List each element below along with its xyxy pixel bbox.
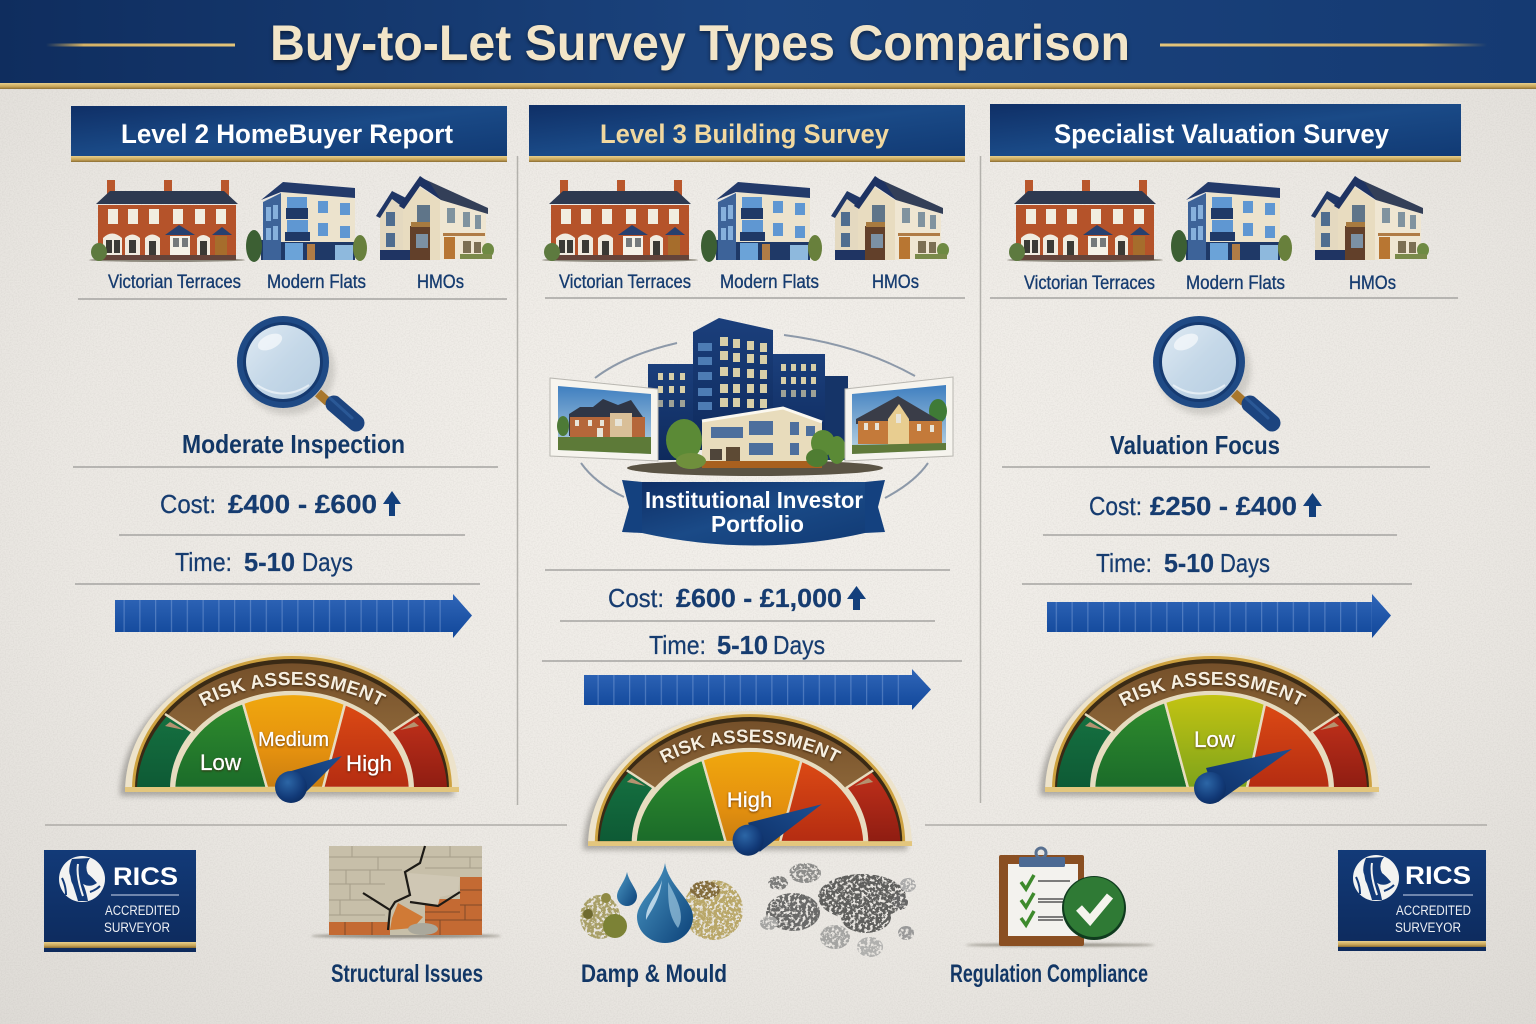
time row: Days bbox=[773, 630, 825, 660]
column dividers bbox=[518, 156, 980, 805]
low label: Low bbox=[1194, 727, 1235, 752]
icon: magnifying glass bbox=[1153, 316, 1272, 423]
needle bbox=[733, 804, 822, 856]
gauge title: RISK ASSESSMENT bbox=[1118, 672, 1307, 708]
time row: 5-10 bbox=[244, 547, 295, 577]
time row: Days bbox=[1220, 548, 1270, 578]
gauge title: RISK ASSESSMENT bbox=[658, 729, 842, 765]
RICS badge right: SURVEYOR bbox=[1395, 920, 1461, 935]
RICS badge left: SURVEYOR bbox=[104, 920, 170, 935]
portfolio banner: Institutional Investor bbox=[645, 487, 863, 513]
property types: HMOs bbox=[872, 272, 919, 293]
cost row: Cost: bbox=[608, 583, 664, 613]
panel heading: Level 3 Building Survey bbox=[600, 119, 889, 149]
RICS badge left: RICS bbox=[113, 863, 178, 891]
needle bbox=[275, 756, 342, 803]
property types: HMOs bbox=[417, 272, 464, 293]
property types bbox=[78, 176, 507, 299]
portfolio banner bbox=[622, 480, 885, 546]
label: damp and mould: Damp & Mould bbox=[581, 960, 727, 988]
gauge segments bbox=[636, 751, 864, 842]
institutional portfolio illustration bbox=[550, 318, 953, 546]
time row: 5-10 bbox=[717, 630, 768, 660]
time row: Time: bbox=[175, 547, 232, 577]
medium label: Medium bbox=[258, 729, 329, 751]
panel heading: Specialist Valuation Survey bbox=[1054, 119, 1389, 149]
mould speckle bbox=[580, 863, 916, 957]
property types: Victorian Terraces bbox=[108, 272, 241, 293]
gauge segments bbox=[1094, 694, 1330, 788]
cost row: £400 - £600 bbox=[228, 489, 377, 519]
panel heading bbox=[529, 105, 965, 162]
ground bbox=[627, 460, 883, 476]
high label: High bbox=[346, 751, 392, 776]
risk gauge: medium-high bbox=[117, 653, 459, 803]
needle bbox=[1194, 749, 1292, 804]
footer divider lines bbox=[45, 824, 1487, 826]
icon: magnifying glass bbox=[237, 316, 356, 423]
icon: structural crack in wall bbox=[311, 846, 501, 938]
cost row bbox=[1089, 491, 1322, 521]
property types: Victorian Terraces bbox=[1024, 273, 1155, 294]
portfolio banner: Portfolio bbox=[711, 511, 804, 537]
bushes bbox=[666, 419, 846, 469]
property types: Modern Flats bbox=[1186, 273, 1285, 294]
time row bbox=[1096, 548, 1270, 578]
icon: clipboard with check bbox=[965, 848, 1155, 946]
timeline arrow bbox=[1047, 594, 1391, 638]
label: regulation compliance: Regulation Compliance bbox=[950, 960, 1148, 988]
time row bbox=[649, 630, 825, 660]
gauge segments bbox=[174, 694, 410, 788]
gauge title: RISK ASSESSMENT bbox=[198, 672, 387, 708]
time row: Time: bbox=[1096, 548, 1152, 578]
icon: lion emblem bbox=[1353, 855, 1399, 901]
property types: Modern Flats bbox=[267, 272, 366, 293]
timeline arrow bbox=[584, 669, 931, 710]
time row bbox=[175, 547, 353, 577]
panel heading bbox=[990, 104, 1461, 162]
time row: Days bbox=[302, 547, 353, 577]
icon: damp and mould bbox=[580, 863, 916, 957]
RICS badge left bbox=[44, 850, 196, 952]
RICS badge right bbox=[1338, 850, 1486, 951]
cost row: Cost: bbox=[1089, 491, 1142, 521]
RICS badge right: ACCREDITED bbox=[1396, 903, 1471, 918]
inspection label: Valuation Focus bbox=[1110, 430, 1280, 460]
property types: HMOs bbox=[1349, 273, 1396, 294]
property types bbox=[990, 176, 1458, 298]
risk gauge: high bbox=[580, 711, 912, 856]
high label: High bbox=[727, 788, 772, 812]
panel: Level 2 HomeBuyer Report bbox=[71, 106, 507, 803]
RICS badge left: ACCREDITED bbox=[105, 903, 180, 918]
property types bbox=[542, 176, 965, 298]
label: structural issues: Structural Issues bbox=[331, 960, 483, 988]
panel: Specialist Valuation Survey bbox=[990, 104, 1461, 804]
tower blocks bbox=[648, 318, 848, 460]
photo frame right bbox=[845, 377, 953, 461]
time row: 5-10 bbox=[1164, 548, 1214, 578]
panel: Level 3 Building Survey bbox=[529, 105, 965, 856]
cost row: £600 - £1,000 bbox=[676, 583, 842, 613]
inspection label: Moderate Inspection bbox=[182, 429, 405, 459]
panel heading bbox=[71, 106, 507, 162]
title: Buy-to-Let Survey Types Comparison bbox=[270, 15, 1130, 71]
cost row bbox=[608, 583, 866, 613]
low label: Low bbox=[200, 750, 241, 775]
RICS badge right: RICS bbox=[1405, 862, 1471, 890]
panel heading: Level 2 HomeBuyer Report bbox=[121, 119, 453, 149]
property types: Modern Flats bbox=[720, 272, 819, 293]
cost row bbox=[160, 489, 401, 519]
cost row: £250 - £400 bbox=[1150, 491, 1297, 521]
time row: Time: bbox=[649, 630, 706, 660]
risk gauge: low bbox=[1037, 653, 1379, 804]
timeline arrow bbox=[115, 594, 472, 638]
header band bbox=[0, 0, 1536, 89]
orbit arcs bbox=[581, 335, 928, 498]
icon: lion emblem bbox=[59, 856, 105, 902]
property types: Victorian Terraces bbox=[559, 272, 691, 293]
cost row: Cost: bbox=[160, 489, 216, 519]
front building bbox=[702, 408, 822, 468]
water drops bbox=[617, 872, 637, 906]
photo frame left bbox=[550, 378, 658, 461]
